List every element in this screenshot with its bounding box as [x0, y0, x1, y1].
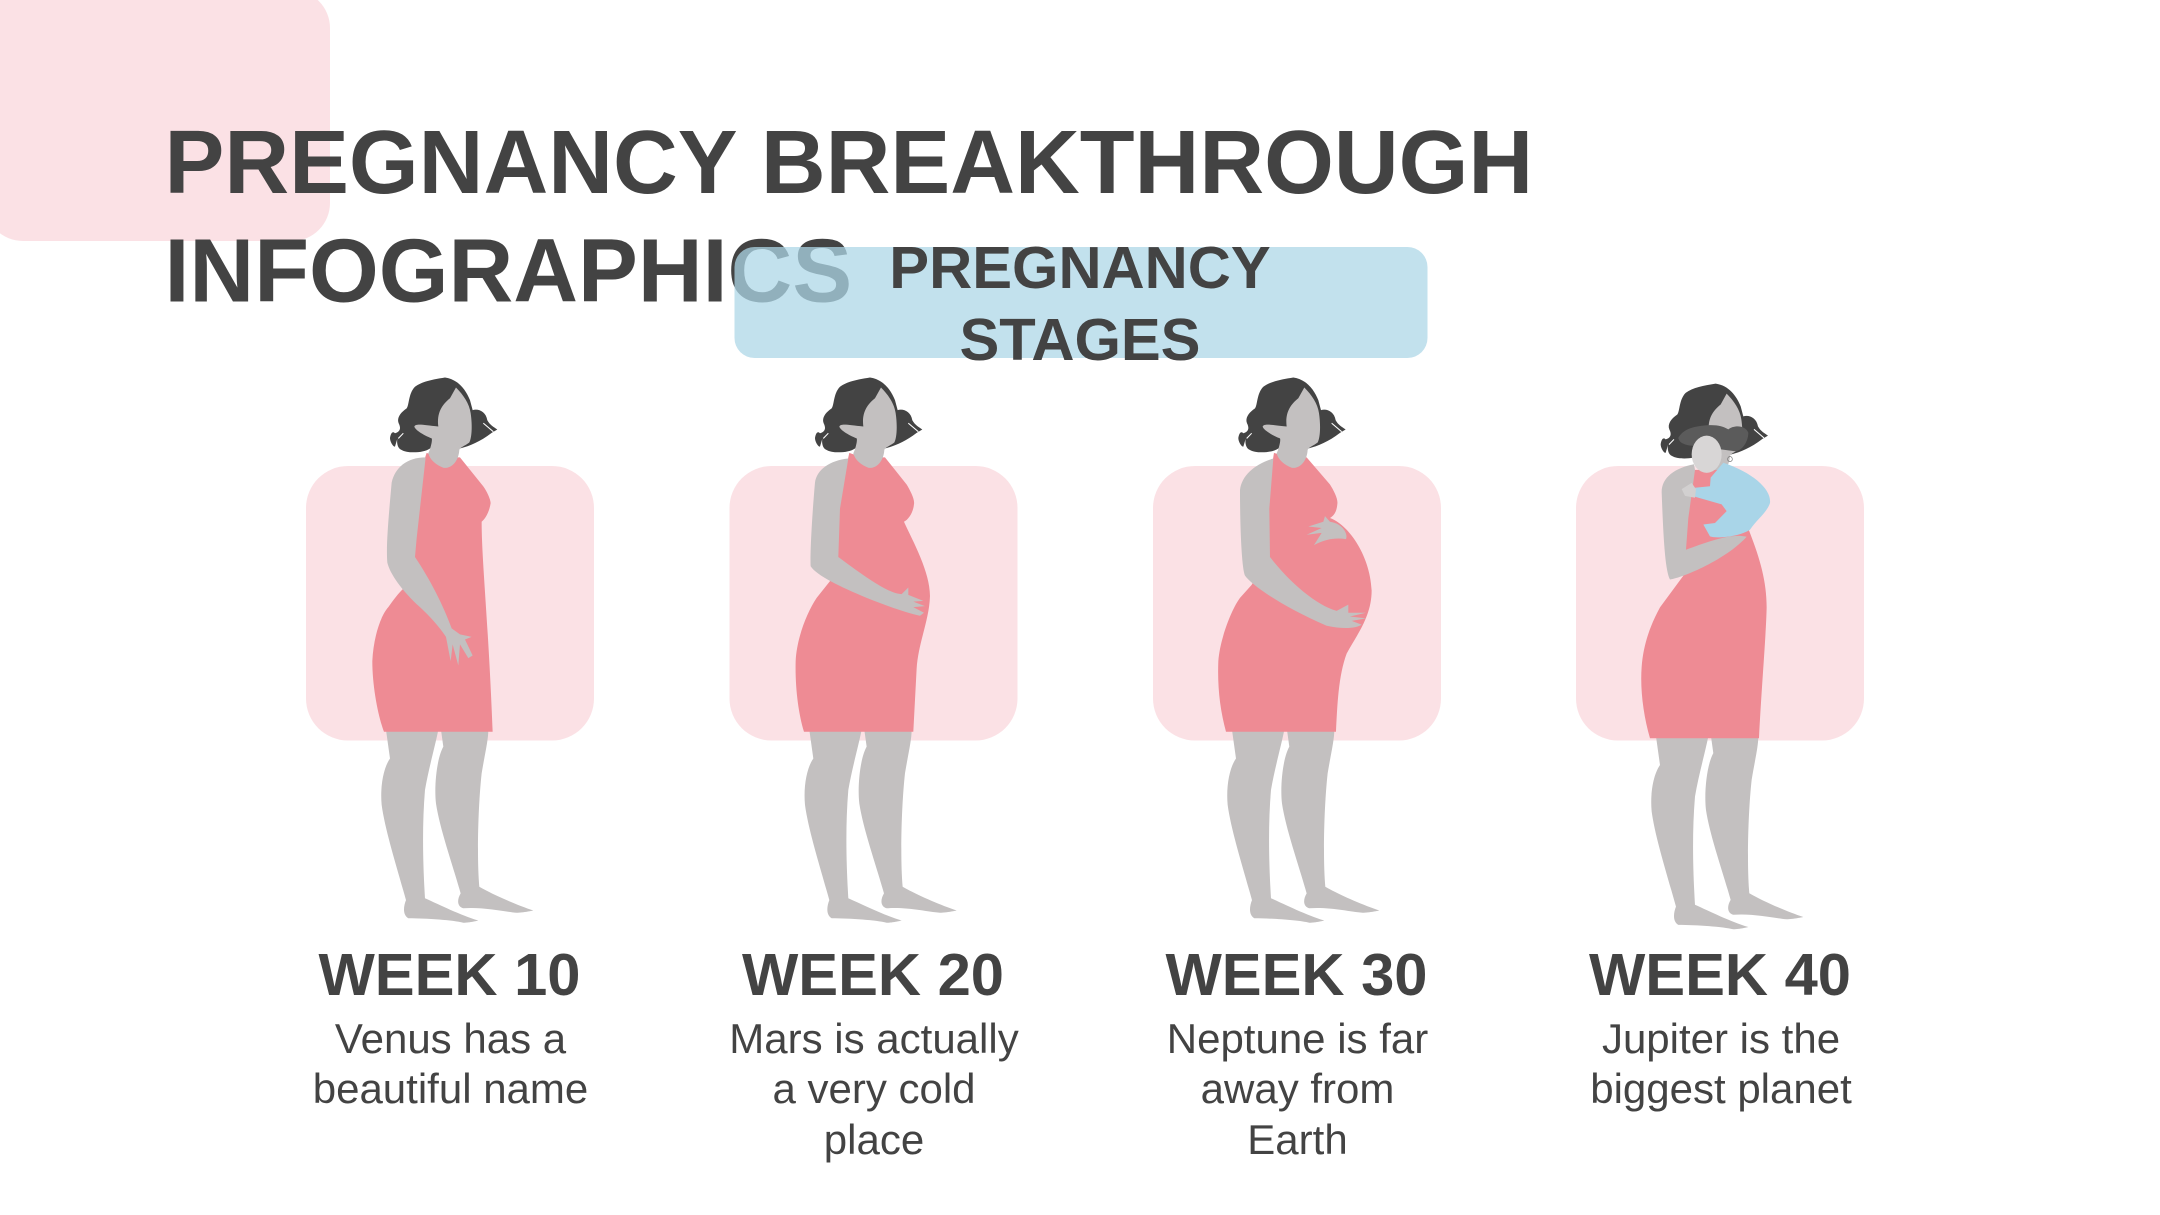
title: PREGNANCY BREAKTHROUGH	[164, 113, 1533, 213]
pink backdrop week 30	[1153, 466, 1441, 740]
label: week 40: WEEK 40	[1589, 941, 1851, 1008]
description: week 40: biggest planet	[1590, 1065, 1852, 1112]
description: week 20: Mars is actually	[729, 1015, 1019, 1062]
label: week 10: WEEK 10	[318, 941, 581, 1008]
description: week 10	[313, 1015, 588, 1112]
figure: week 10	[372, 377, 533, 923]
label: week 20: WEEK 20	[742, 941, 1004, 1008]
decorative pink panel	[0, 0, 330, 241]
description: week 20: a very cold	[772, 1065, 976, 1112]
pink backdrop week 40	[1576, 466, 1864, 740]
title: INFOGRAPHICS	[164, 222, 852, 322]
stage 1: week 10	[306, 377, 594, 1112]
pink backdrop week 20	[730, 466, 1018, 740]
figure: week 40	[1641, 384, 1803, 929]
description: week 40: Jupiter is the	[1602, 1015, 1840, 1062]
description: week 10: beautiful name	[313, 1065, 588, 1112]
stage 3: week 30	[1153, 377, 1441, 1163]
description: week 40	[1590, 1015, 1852, 1112]
heading: pregnancy stages	[889, 234, 1271, 373]
description: week 30: Neptune is far	[1167, 1015, 1428, 1062]
heading: pregnancy stages: PREGNANCY	[889, 234, 1271, 301]
description: week 30	[1167, 1015, 1428, 1163]
description: week 30: away from	[1201, 1065, 1394, 1112]
stage 4: week 40	[1576, 384, 1864, 1112]
label: week 30: WEEK 30	[1165, 941, 1428, 1008]
panel: pregnancy stages banner	[734, 247, 1428, 358]
description: week 30: Earth	[1247, 1116, 1348, 1163]
description: week 20	[729, 1015, 1019, 1163]
description: week 10: Venus has a	[335, 1015, 567, 1062]
title	[164, 113, 1533, 322]
figure: week 30	[1218, 377, 1379, 923]
heading: pregnancy stages: STAGES	[960, 306, 1200, 373]
pink backdrop week 10	[306, 466, 594, 740]
description: week 20: place	[824, 1116, 924, 1163]
figure: week 20	[796, 377, 957, 923]
stage 2: week 20	[729, 377, 1019, 1163]
